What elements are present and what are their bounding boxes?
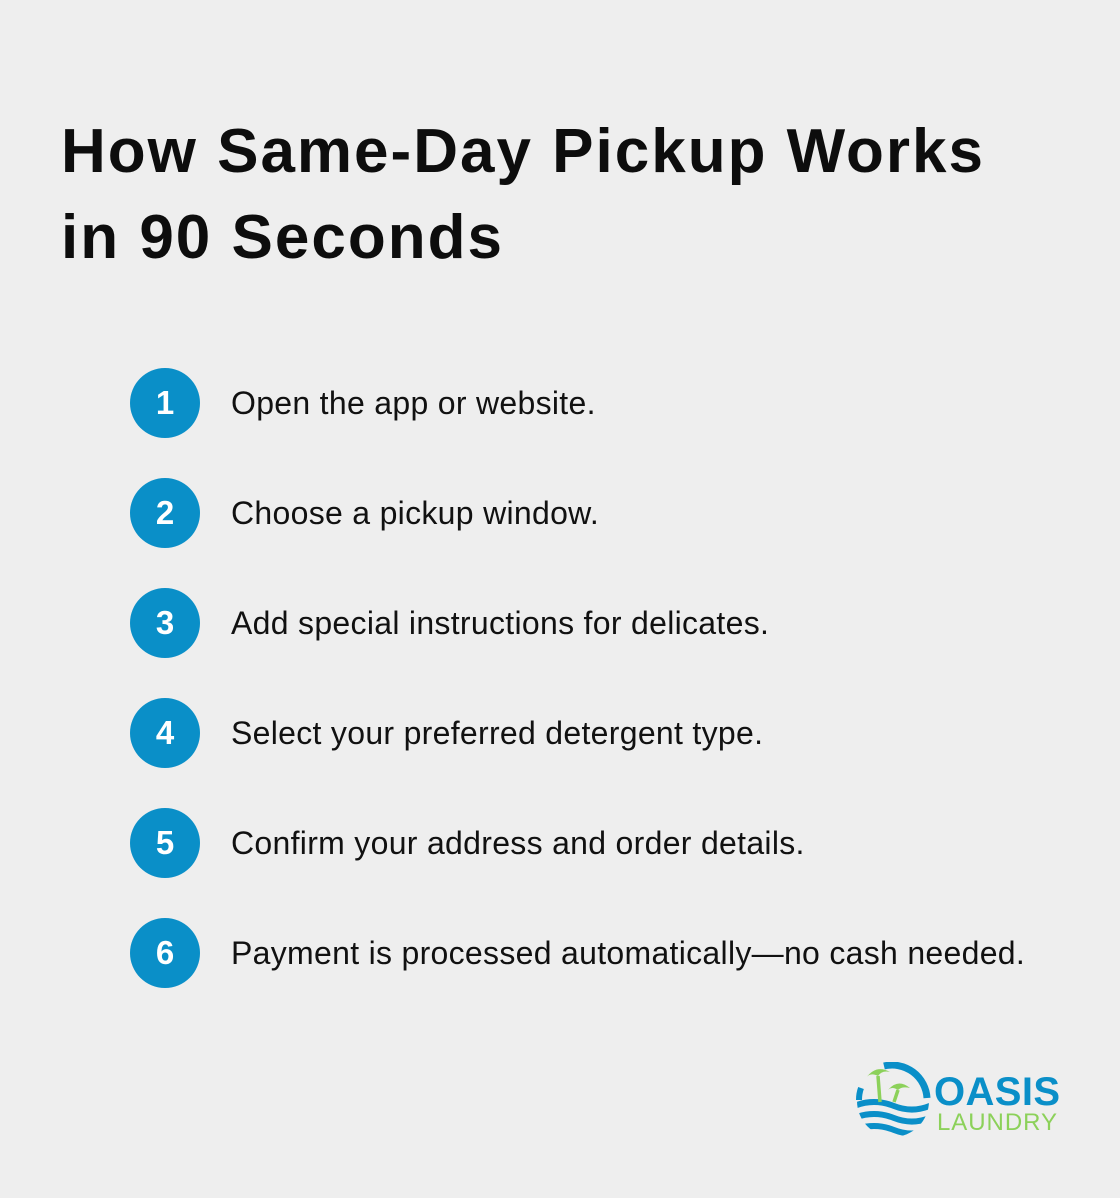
step 3 [130, 588, 769, 658]
step 5: 5 [156, 824, 174, 861]
step 2: Choose a pickup window. [231, 495, 599, 531]
logo text: OASIS [934, 1070, 1060, 1114]
step 1: 1 [156, 384, 174, 421]
title: How Same-Day Pickup Works [61, 117, 985, 186]
step 6: 6 [156, 934, 174, 971]
step 2: 2 [156, 494, 174, 531]
logo: LAUNDRY [937, 1109, 1057, 1136]
step 3: Add special instructions for delicates. [231, 605, 769, 641]
step 6: Payment is processed automatically—no cash needed. [231, 935, 1025, 971]
step 1: Open the app or website. [231, 385, 596, 421]
logo [856, 1062, 1060, 1136]
step 1 [130, 368, 596, 438]
title [61, 117, 985, 272]
step 2 [130, 478, 599, 548]
step 5: Confirm your address and order details. [231, 825, 805, 861]
step 4: 4 [156, 714, 174, 751]
step 4 [130, 698, 763, 768]
step 5 [130, 808, 805, 878]
step 4: Select your preferred detergent type. [231, 715, 763, 751]
step 3: 3 [156, 604, 174, 641]
icon: logo circle [854, 1065, 934, 1134]
step 6 [130, 918, 1025, 988]
title: in 90 Seconds [61, 203, 504, 272]
